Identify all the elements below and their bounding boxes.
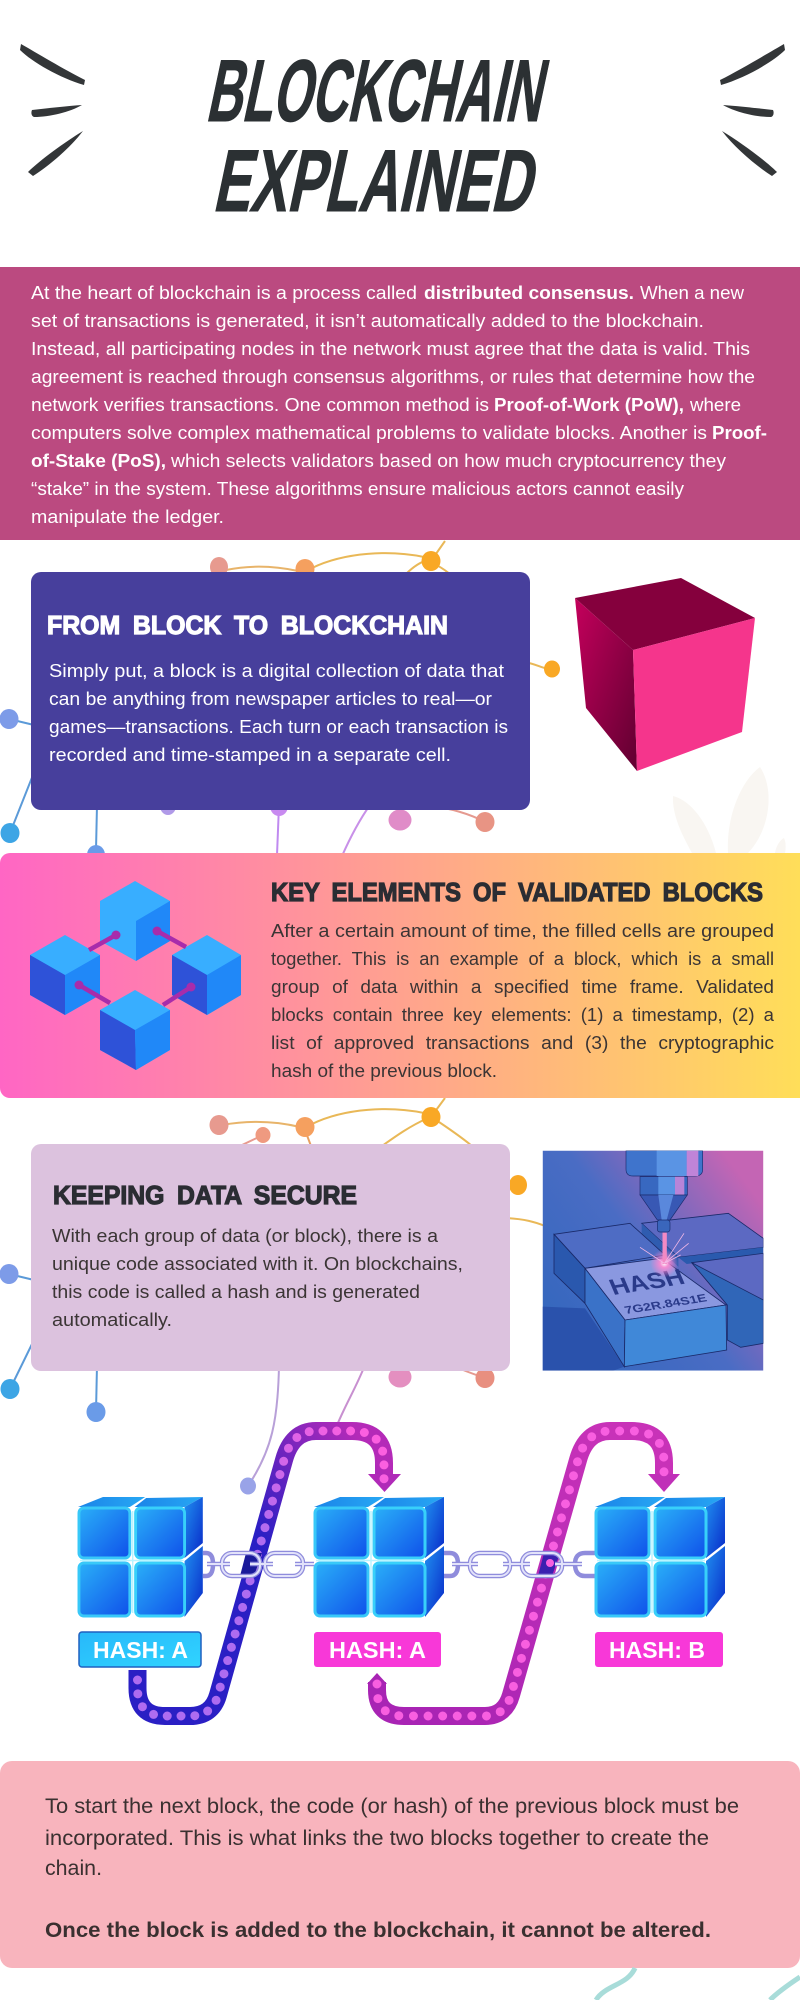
label: hash B pink (595, 1632, 723, 1667)
icon: left brush strokes (20, 44, 85, 176)
body text: With each group of data (or block), there is a (52, 1225, 439, 1246)
label: hash A blue (79, 1632, 201, 1667)
intro text: distributed consensus. (424, 282, 634, 303)
body text: together. This is an example of a block, which is a small (271, 948, 774, 969)
block cluster 3 (595, 1497, 725, 1617)
block cluster 1 (78, 1497, 203, 1617)
ribbon arrow: hash A to hash B block (367, 1431, 680, 1716)
diagram: linked blocks and hashes (78, 1431, 725, 1716)
heading: KEEPING DATA SECURE (53, 1180, 357, 1210)
conclusion text (45, 1794, 739, 1942)
body text: Simply put, a block is a digital collection of data that (49, 660, 504, 681)
body text: hash of the previous block. (271, 1060, 497, 1081)
body text: recorded and time-stamped in a separate cell. (49, 744, 451, 765)
chain: block 1 to block 2 (203, 1553, 314, 1576)
label: hash A blue: HASH: A (93, 1637, 188, 1663)
body text: list of approved transactions and (3) the cryptographic (271, 1032, 774, 1053)
decorative teal lines (596, 1968, 800, 2000)
title (201, 41, 557, 230)
intro text: Proof-of-Work (PoW), (494, 394, 684, 415)
body text (271, 920, 775, 1081)
title: BLOCKCHAIN (201, 41, 557, 140)
body text: blocks contain three key elements: (1) a timestamp, (2) a (271, 1004, 775, 1025)
body text: this code is called a hash and is generated (52, 1281, 420, 1302)
nozzle (626, 1151, 703, 1176)
label: hash A pink: HASH: A (329, 1637, 426, 1663)
intro text: computers solve complex mathematical problems to validate blocks. Another is (31, 422, 707, 443)
intro text: Instead, all participating nodes in the network must agree that the data is valid. This (31, 338, 750, 359)
image: laser engraving a hash on a block: 7G2R.84S1E (623, 1292, 709, 1317)
body text (52, 1225, 463, 1330)
label: hash B pink: HASH: B (609, 1637, 705, 1663)
body text: automatically. (52, 1309, 172, 1330)
network nodes: lower (0, 1098, 545, 1494)
decorative plant (673, 767, 786, 853)
body text: After a certain amount of time, the filled cells are grouped (271, 920, 774, 941)
conclusion text: To start the next block, the code (or hash) of the previous block must be (45, 1794, 739, 1818)
panel: conclusion (0, 1761, 800, 1968)
conclusion text: Once the block is added to the blockchain, it cannot be altered. (45, 1918, 711, 1942)
icon: right brush strokes (720, 44, 785, 176)
body text: can be anything from newspaper articles to real—or (49, 688, 492, 709)
block cluster 2 (314, 1497, 444, 1617)
body text (49, 660, 508, 765)
icon: four connected cubes (30, 881, 241, 1070)
label: hash A pink (314, 1632, 441, 1667)
panel: keeping data secure (31, 1144, 510, 1371)
conclusion text: incorporated. This is what links the two blocks together to create the (45, 1826, 709, 1850)
body text: games—transactions. Each turn or each transaction is (49, 716, 508, 737)
title: EXPLAINED (208, 131, 547, 230)
intro text: Proof- (712, 422, 767, 443)
network nodes: upper (0, 541, 560, 865)
ribbon arrow: hash A to next block (138, 1431, 401, 1716)
body text: group of data within a specified time frame. Validated (271, 976, 774, 997)
intro text: manipulate the ledger. (31, 506, 224, 527)
body text: unique code associated with it. On blockchains, (52, 1253, 463, 1274)
intro text: where (689, 394, 741, 415)
engraved text: HASH (605, 1264, 688, 1300)
intro text: which selects validators based on how much cryptocurrency they (170, 450, 727, 471)
intro text: network verifies transactions. One common method is (31, 394, 489, 415)
image: laser engraving a hash on a block (543, 1151, 763, 1371)
panel: key elements of validated blocks (0, 853, 800, 1098)
intro text: agreement is reached through consensus algorithms, or rules that determine how the (31, 366, 755, 387)
chain: block 2 to block 3 (444, 1553, 595, 1576)
icon: pink cube (575, 578, 755, 771)
intro text: of-Stake (PoS), (31, 450, 166, 471)
intro text: When a new (640, 282, 745, 303)
heading: FROM BLOCK TO BLOCKCHAIN (47, 610, 448, 640)
laser (650, 1249, 678, 1277)
panel: distributed consensus intro (0, 267, 800, 540)
intro text: set of transactions is generated, it isn’t automatically added to the blockchain. (31, 310, 704, 331)
heading: KEY ELEMENTS OF VALIDATED BLOCKS (271, 877, 763, 907)
conclusion text: chain. (45, 1856, 102, 1880)
intro text (31, 282, 767, 527)
intro text: At the heart of blockchain is a process called (31, 282, 417, 303)
intro text: “stake” in the system. These algorithms ensure malicious actors cannot easily (31, 478, 685, 499)
panel: from block to blockchain (31, 572, 530, 810)
